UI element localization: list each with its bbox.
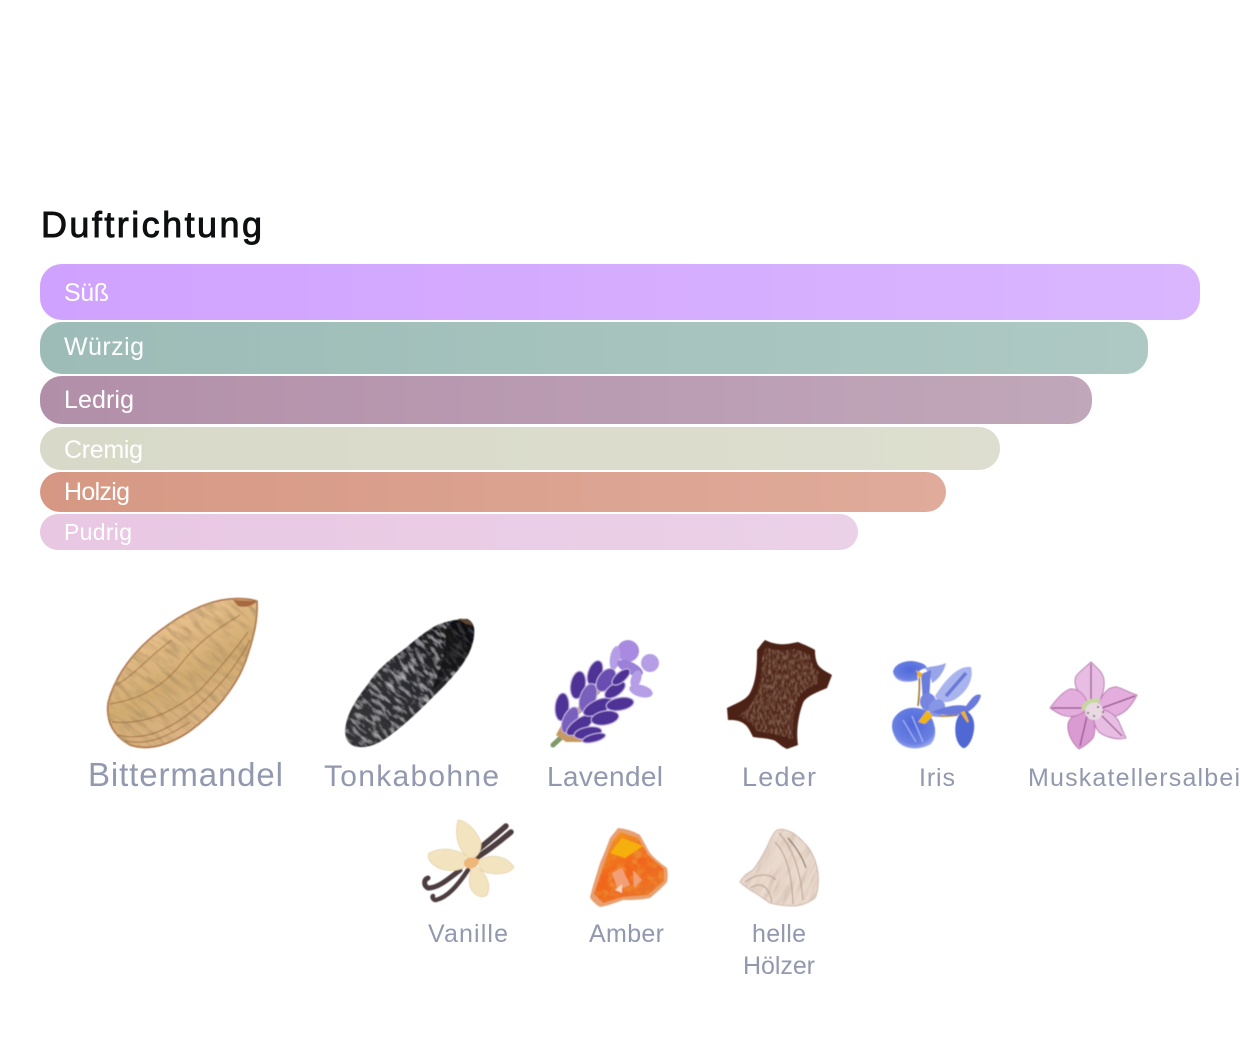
bar: Pudrig: Pudrig (64, 519, 132, 545)
ingredient: Leder (727, 640, 832, 792)
label: Tonkabohne (324, 760, 499, 793)
label: helle (752, 920, 806, 948)
label: Amber (589, 920, 664, 948)
bar: Cremig (40, 427, 1000, 470)
icon: amber stone (590, 828, 668, 907)
bar: Cremig: Cremig (64, 436, 143, 464)
icon: iris flower (892, 661, 981, 748)
ingredient: helle Hölzer (711, 799, 848, 980)
icon: vanilla flower and pods (425, 820, 514, 900)
label: Iris (919, 764, 955, 792)
bar chart: Duftrichtung (40, 264, 1200, 550)
label: Hölzer (743, 952, 815, 980)
icon: lavender (553, 640, 659, 745)
label: Bittermandel (88, 756, 283, 793)
bar: Pudrig (40, 514, 858, 550)
bar: Würzig: Würzig (64, 333, 144, 361)
ingredient: Muskatellersalbei (1028, 662, 1240, 792)
bar: Holzig (40, 472, 946, 512)
title: Duftrichtung (41, 204, 262, 245)
ingredient: Vanille (425, 820, 514, 948)
ingredient: Iris (892, 661, 981, 792)
ingredient: Tonkabohne (281, 554, 538, 812)
bar: Ledrig (40, 376, 1092, 424)
icon: leather hide (727, 640, 832, 749)
label (743, 920, 815, 980)
bar: Süß: Süß (64, 279, 109, 307)
label: Vanille (428, 920, 508, 948)
ingredient: Lavendel (547, 640, 663, 792)
label: Lavendel (547, 761, 663, 792)
icon: tonka bean (281, 554, 538, 812)
bar: Süß (40, 264, 1200, 320)
icon: pale wood piece (711, 799, 848, 936)
bar: Holzig: Holzig (64, 478, 130, 506)
icon: almond (34, 525, 330, 821)
bar: Ledrig: Ledrig (64, 386, 134, 414)
icon: clary sage flower (1050, 662, 1137, 749)
ingredient: Bittermandel (34, 525, 330, 821)
label: Leder (742, 762, 816, 792)
bar: Würzig (40, 322, 1148, 374)
ingredient: Amber (589, 828, 668, 948)
label: Muskatellersalbei (1028, 764, 1240, 792)
